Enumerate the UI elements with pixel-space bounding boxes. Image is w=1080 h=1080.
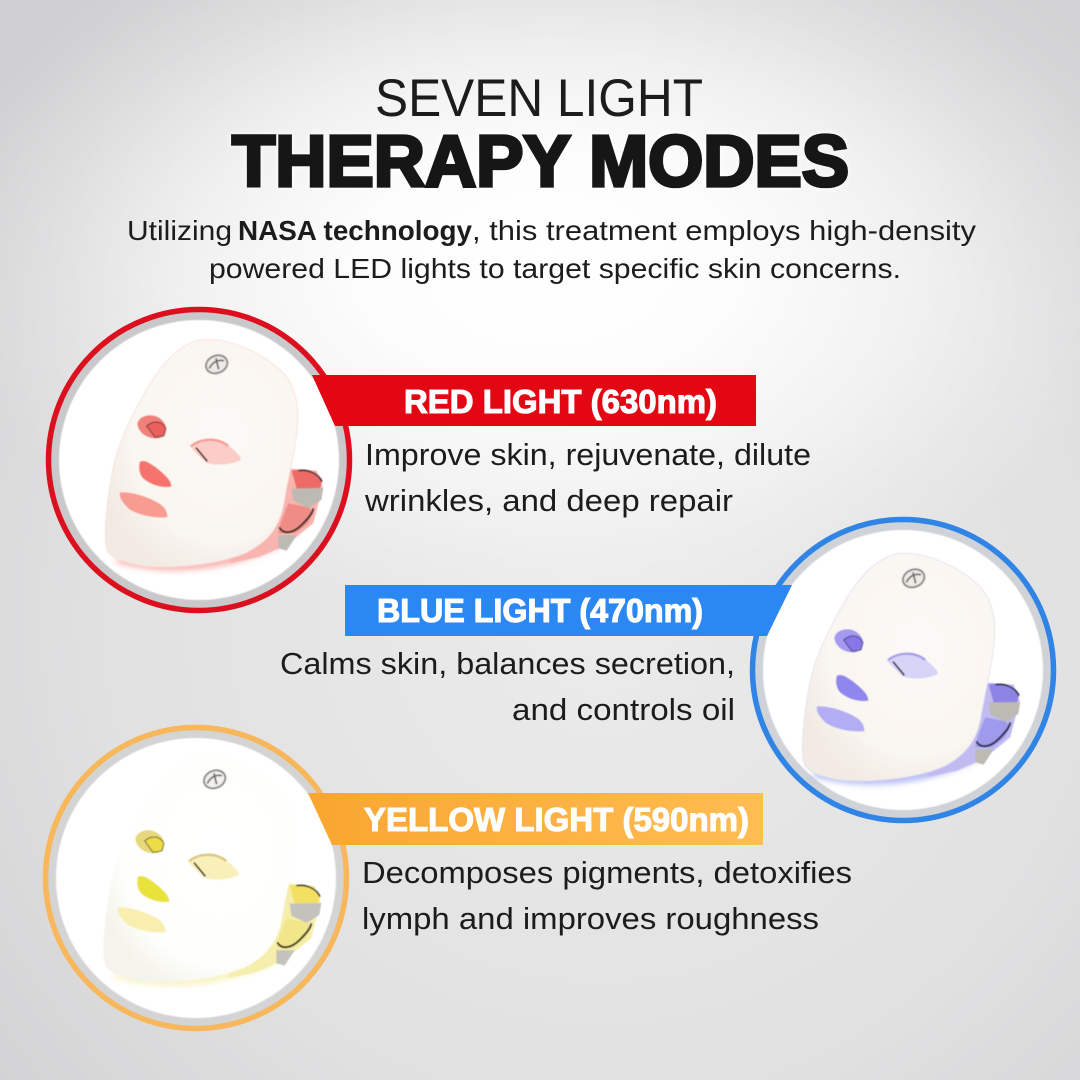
yellow description: lymph and improves roughness (362, 901, 819, 936)
icon: yellow LED mask (103, 754, 321, 986)
yellow description (362, 855, 852, 936)
header (127, 69, 976, 284)
blue mask photo circle (752, 520, 1054, 820)
title line two: THERAPY MODES (232, 122, 849, 202)
yellow description: Decomposes pigments, detoxifies (362, 855, 852, 890)
red label bar (312, 375, 756, 426)
intro text: , this treatment employs high-density (472, 215, 976, 246)
blue description: Calms skin, balances secretion, (280, 646, 735, 681)
red description: wrinkles, and deep repair (364, 483, 733, 518)
intro text: Utilizing (127, 215, 232, 246)
yellow label bar: YELLOW LIGHT (590nm) (364, 801, 749, 838)
yellow label bar (308, 793, 763, 845)
icon: blue LED mask (802, 553, 1020, 785)
panel: yellow light (46, 728, 852, 1028)
red label bar: RED LIGHT (630nm) (404, 383, 717, 420)
intro text: NASA technology (238, 215, 473, 246)
icon: red LED mask (105, 339, 323, 571)
intro text: powered LED lights to target specific skin concerns. (209, 253, 901, 284)
panel: red light (48, 310, 811, 610)
red mask photo circle (48, 310, 350, 610)
blue label bar: BLUE LIGHT (470nm) (377, 592, 703, 629)
blue description (280, 646, 735, 727)
red description: Improve skin, rejuvenate, dilute (365, 437, 811, 472)
yellow mask photo circle (46, 728, 346, 1028)
panel: blue light (280, 520, 1054, 820)
blue description: and controls oil (512, 692, 735, 727)
title line one: SEVEN LIGHT (375, 69, 703, 128)
intro text (127, 215, 976, 284)
blue label bar (345, 585, 792, 636)
red description (364, 437, 811, 518)
